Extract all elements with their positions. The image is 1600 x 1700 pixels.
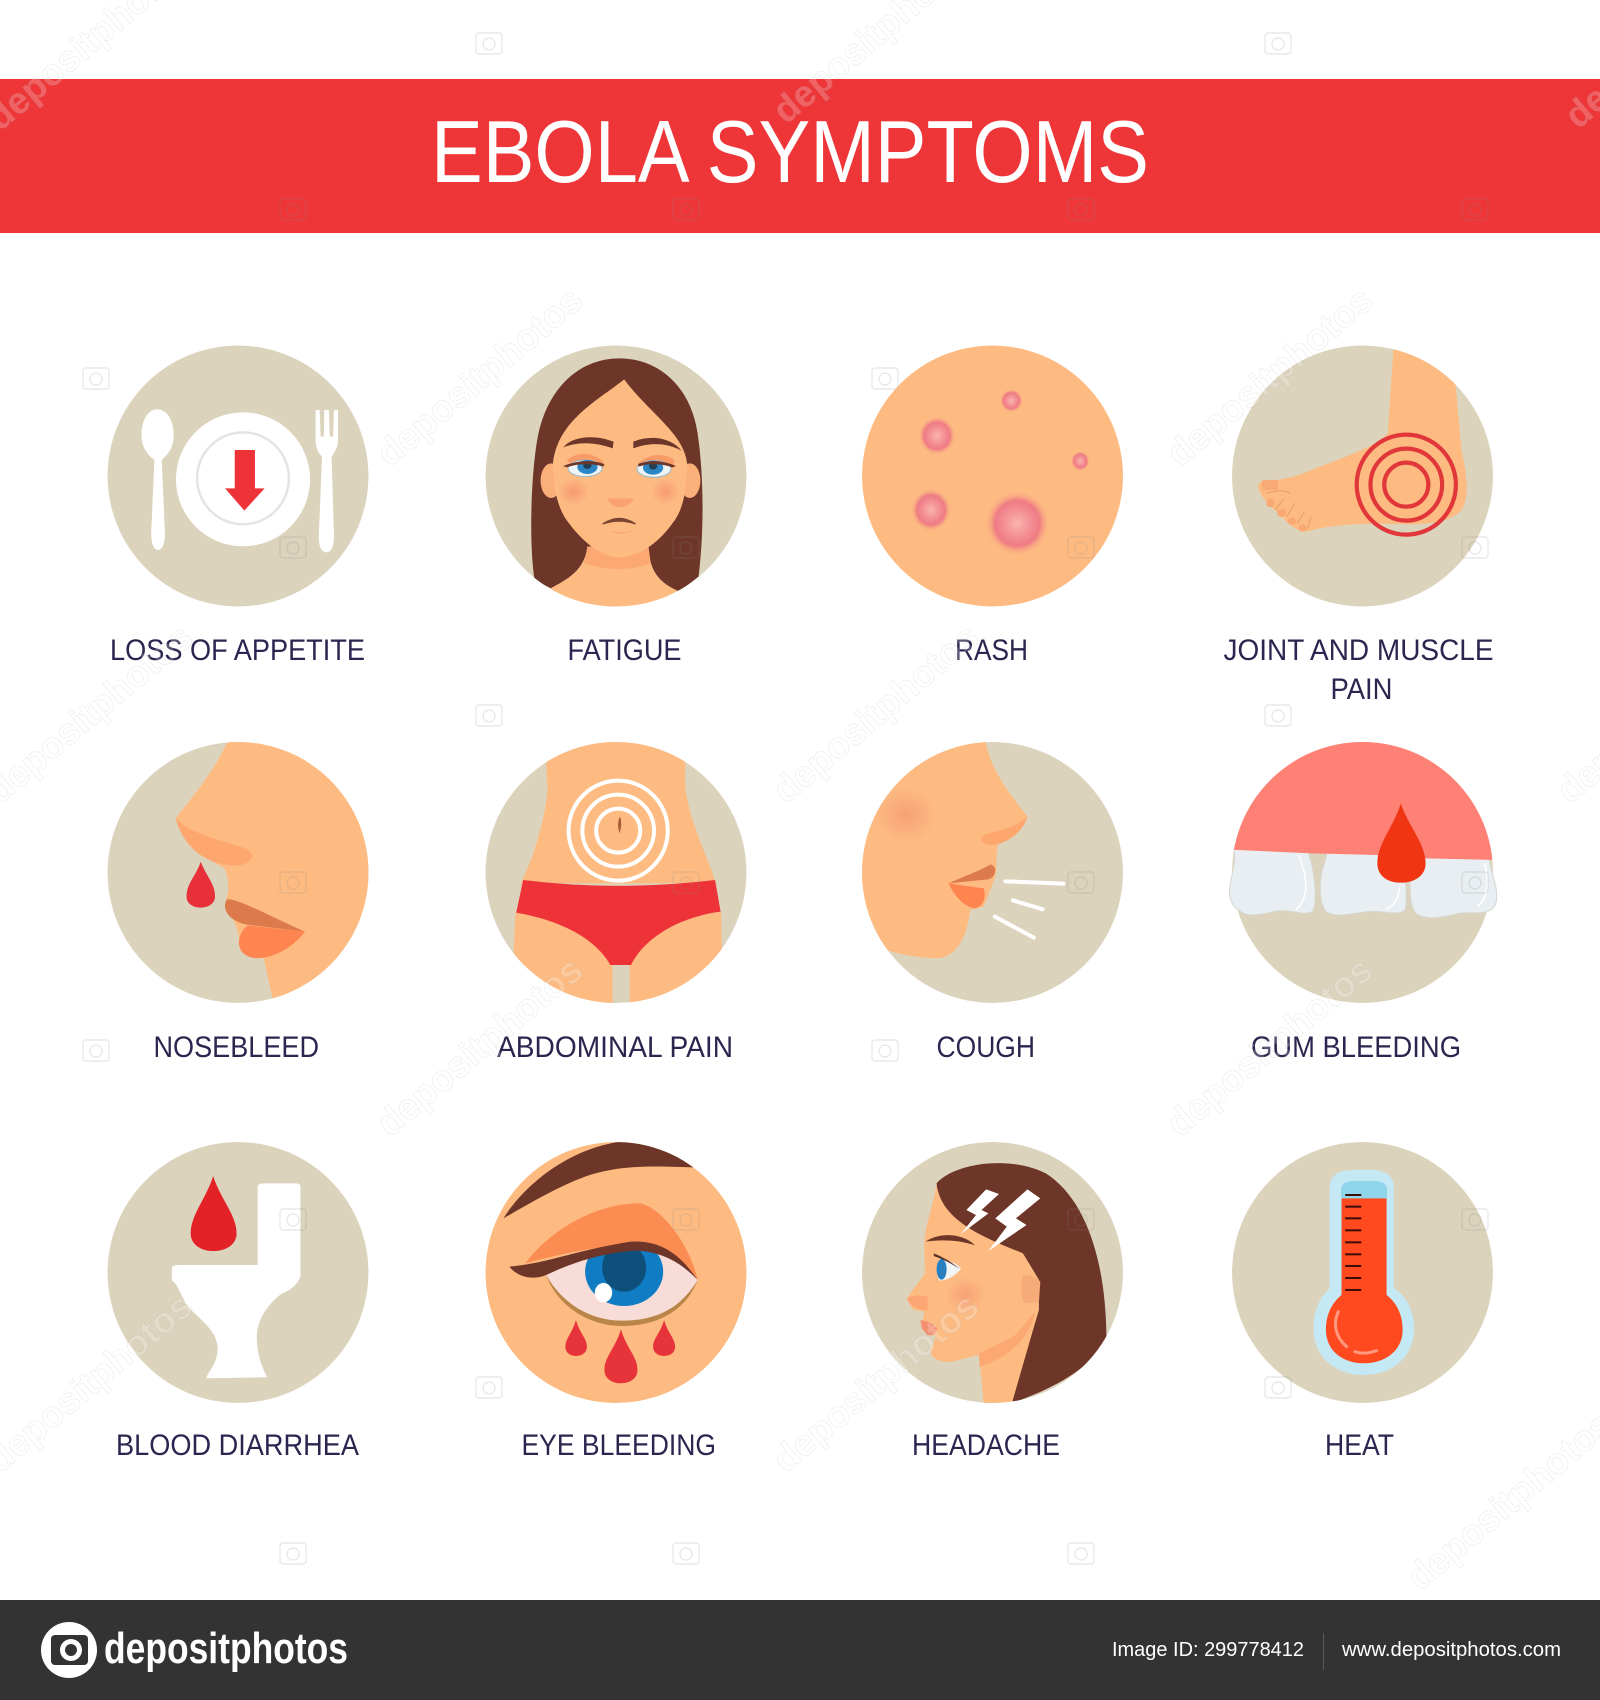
icon: toilet with blood drop — [108, 1142, 368, 1403]
website: www.depositphotos.com — [1341, 1639, 1561, 1661]
label: JOINT AND MUSCLE — [1224, 634, 1494, 667]
icon: skin rash — [862, 346, 1123, 606]
panel: fatigue — [486, 346, 746, 667]
watermarks: depositphotos — [369, 279, 590, 474]
title band — [0, 79, 1600, 233]
panel: blood diarrhea — [108, 1142, 368, 1462]
panel: headache — [862, 1142, 1123, 1462]
icon: woman with lightning bolts — [862, 1142, 1123, 1405]
panel: joint and muscle pain — [1224, 340, 1494, 706]
footer bar — [0, 1600, 1600, 1700]
watermarks: depositphotos — [765, 1285, 986, 1480]
panel: rash — [862, 346, 1123, 667]
icon: abdomen with rings — [486, 738, 746, 1007]
panel: nosebleed — [108, 738, 378, 1064]
label: RASH — [955, 634, 1028, 667]
icon: nose with blood drop — [108, 738, 378, 1003]
image id: Image ID: 299778412 — [1112, 1639, 1304, 1661]
watermarks: depositphotos — [1159, 949, 1380, 1144]
watermarks: depositphotos — [369, 949, 590, 1144]
icon: depositphotos logo — [41, 1622, 97, 1678]
label: COUGH — [936, 1031, 1035, 1064]
brand name: depositphotos — [104, 1624, 348, 1673]
title: EBOLA SYMPTOMS — [431, 102, 1149, 201]
panel: cough — [853, 738, 1123, 1064]
watermarks: depositphotos — [1159, 279, 1380, 474]
icon: plate and cutlery — [108, 346, 368, 606]
label: BLOOD DIARRHEA — [116, 1429, 359, 1462]
label: FATIGUE — [568, 634, 682, 667]
watermarks: depositphotos — [765, 616, 986, 811]
label: GUM BLEEDING — [1251, 1031, 1461, 1064]
label: PAIN — [1330, 673, 1392, 706]
label: NOSEBLEED — [154, 1031, 319, 1064]
icon: foot with pain rings — [1232, 340, 1493, 606]
icon: bleeding eye — [486, 1141, 746, 1403]
label: LOSS OF APPETITE — [110, 634, 365, 667]
label: HEAT — [1325, 1429, 1394, 1462]
panel: gum bleeding — [1229, 738, 1497, 1064]
watermark camera marks — [83, 33, 1488, 1564]
panel: abdominal pain — [486, 738, 746, 1064]
label — [1224, 634, 1494, 706]
panel: loss of appetite — [108, 346, 368, 667]
label: ABDOMINAL PAIN — [497, 1031, 733, 1064]
label: EYE BLEEDING — [522, 1429, 716, 1462]
label: HEADACHE — [912, 1429, 1060, 1462]
panel: heat — [1232, 1142, 1493, 1462]
icon: thermometer — [1232, 1142, 1493, 1403]
icon: coughing face — [853, 738, 1123, 1003]
icon: bleeding gum and teeth — [1229, 738, 1497, 1003]
panel: eye bleeding — [486, 1141, 746, 1462]
icon: tired woman — [486, 346, 746, 610]
